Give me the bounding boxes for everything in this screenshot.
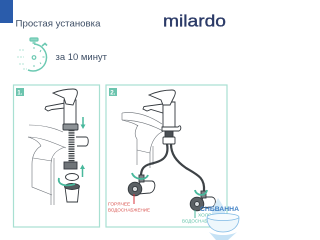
blue corner tab <box>0 0 13 23</box>
watermark: bath logo: СНБВАННА <box>200 207 240 213</box>
hot valve <box>128 175 155 196</box>
title: Простая установка <box>16 18 101 30</box>
mounting bracket <box>76 137 88 146</box>
faucet <box>45 89 78 130</box>
label: hot water supply line 2: ВОДОСНАБЖЕНИЕ <box>108 208 150 214</box>
panel: step 1 <box>14 85 100 227</box>
badge: 2: 2. <box>110 90 116 97</box>
panel: step 2 <box>106 85 227 227</box>
arrows: teal <box>59 117 86 185</box>
icon: stopwatch <box>17 38 47 71</box>
text: time: за 10 минут <box>56 52 107 62</box>
label: cold water supply line 2: ВОДОСНАБЖЕНИЕ <box>182 218 224 224</box>
faucet <box>143 90 181 144</box>
label: cold water supply: ХОЛОДНОЕ <box>198 212 225 218</box>
braided hose <box>68 130 74 163</box>
sink outline <box>122 113 164 168</box>
logo: milardo: milardo <box>163 12 226 30</box>
marker: hot <box>133 194 135 204</box>
fittings <box>64 162 80 202</box>
arrows: rotate <box>132 173 207 218</box>
badge: 2 <box>109 88 117 97</box>
watermark: bath logo <box>200 198 240 240</box>
flexible hoses <box>141 144 204 191</box>
badge: 1 <box>16 88 24 97</box>
badge: 1: 1. <box>17 90 23 97</box>
sink outline <box>28 125 66 205</box>
label: hot water supply: ГОРЯЧЕЕ <box>108 202 130 208</box>
cold valve <box>190 191 215 211</box>
